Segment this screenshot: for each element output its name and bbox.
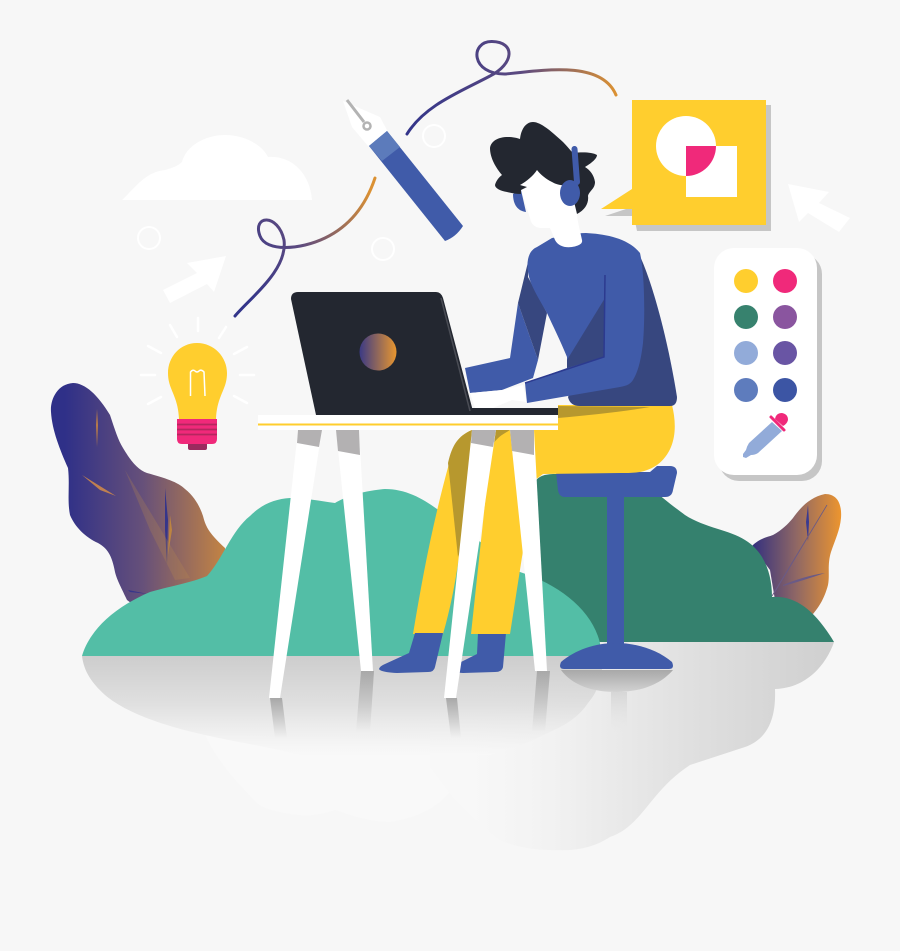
far leg (413, 430, 496, 634)
laptop edge (441, 298, 470, 411)
icon: dropper (743, 413, 788, 458)
reflection: pale lower hill (205, 735, 470, 822)
bulb rays (141, 318, 254, 404)
swirl: top (407, 41, 616, 134)
icon: speech bubble (601, 100, 771, 231)
neck and face (520, 165, 582, 247)
stool (556, 466, 677, 669)
laptop (291, 292, 558, 416)
icon: pen (343, 100, 463, 241)
desk legs (269, 430, 547, 698)
thigh and near leg (471, 405, 675, 634)
swirl: lower (235, 178, 375, 316)
reflection: table legs (270, 671, 550, 738)
far arm (465, 303, 538, 393)
reflection: ground shadow (82, 642, 834, 850)
cloud (122, 135, 312, 200)
leaf: left (51, 383, 226, 606)
icon: light bulb (141, 318, 254, 450)
torso and near arm (525, 233, 644, 403)
desk leg shadows (297, 430, 534, 455)
headset: band (574, 149, 577, 182)
palette card (714, 248, 822, 481)
bulb cap (188, 444, 207, 450)
leaf: right veins (772, 505, 827, 596)
desk (258, 415, 558, 698)
laptop base (472, 408, 558, 416)
leaf: left veins (82, 409, 190, 594)
laptop logo (360, 334, 396, 370)
chest fold (567, 298, 605, 368)
leaf: right (752, 494, 841, 614)
reflection: teal hill (82, 656, 602, 755)
hill: teal (82, 489, 600, 656)
reflection: dark hill (430, 642, 834, 850)
laptop screen (291, 292, 474, 415)
arrow: lower left (163, 256, 226, 303)
person (379, 122, 677, 673)
headset: ear cup (560, 180, 580, 206)
arm line (525, 275, 605, 383)
hill: dark green (534, 474, 834, 642)
bulb glass (168, 343, 227, 419)
desk top (258, 415, 558, 430)
arrow: right (788, 184, 850, 232)
back shadow (568, 252, 677, 406)
hair (490, 122, 597, 214)
headset: left ear (513, 190, 526, 212)
bulb filament (190, 370, 205, 396)
desk stripe (258, 424, 558, 426)
far leg shadow (448, 430, 496, 557)
bulb base (177, 419, 217, 444)
hand (470, 385, 527, 408)
shoe: near (447, 633, 506, 673)
shoe: far (379, 633, 443, 673)
decorative circles (138, 125, 445, 260)
thigh shadow (492, 406, 650, 446)
far arm shadow (518, 262, 547, 360)
reflection: stool base (561, 670, 673, 692)
reflection: stool post (611, 692, 627, 732)
